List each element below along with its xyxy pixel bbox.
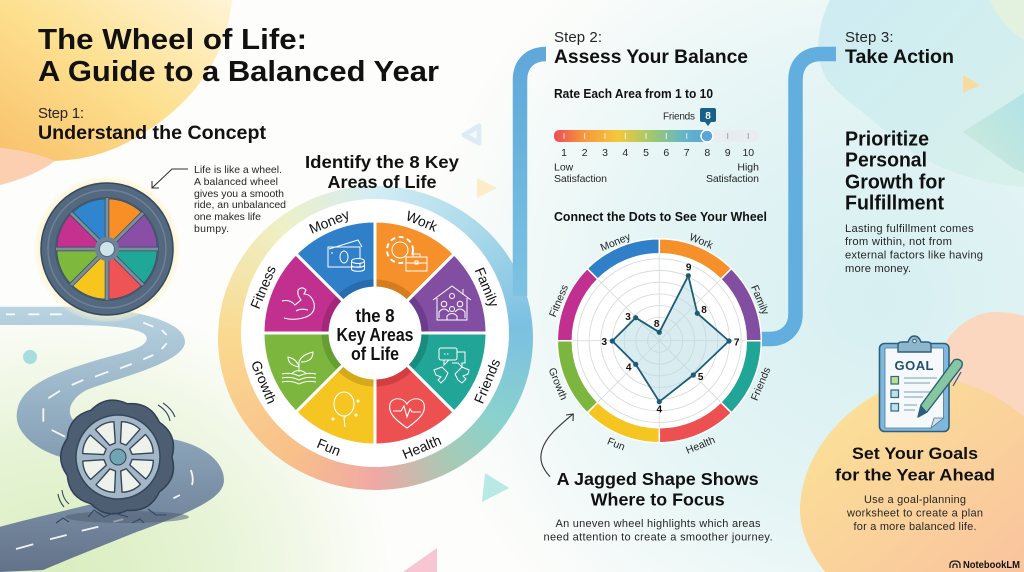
badge: rating 8: 8 <box>705 111 711 122</box>
road <box>0 307 224 572</box>
sector labels: Work <box>404 207 441 235</box>
icon: balanced wheel <box>34 176 180 322</box>
heading: identify the 8 key areas: Areas of Life <box>328 172 437 192</box>
slider low label <box>554 162 607 185</box>
heading: prioritize <box>845 129 945 214</box>
background: peach blob <box>0 148 55 185</box>
heading: step 2: Step 2: <box>554 29 602 46</box>
radar rim labels: Fitness <box>547 283 571 319</box>
hub text: of Life <box>351 344 399 364</box>
heading: set your goals <box>835 444 995 485</box>
icon: growth <box>282 352 316 384</box>
callout text: life is like a wheel: gives you a smooth <box>194 188 284 200</box>
icon: family house <box>433 286 471 320</box>
wheel hub <box>330 288 420 378</box>
inner shaded band <box>325 283 425 383</box>
callout text: life is like a wheel: Life is like a wheel. <box>194 164 282 176</box>
radar values: 8 <box>654 319 660 330</box>
hub text: Key Areas <box>336 325 414 345</box>
title <box>38 24 439 88</box>
slider <box>554 130 759 142</box>
background: yellow blob bottom right <box>800 378 1024 572</box>
heading: step 1: Understand the Concept <box>38 122 267 144</box>
radar polygon <box>612 276 729 402</box>
heading: set your goals: for the Year Ahead <box>835 466 995 485</box>
connector: step 3 <box>755 54 836 339</box>
radar values: 9 <box>686 263 692 274</box>
background: top-left yellow blob <box>0 0 232 161</box>
slider low label: Satisfaction <box>554 173 607 185</box>
text: goal planning: Use a goal-planning <box>864 494 966 506</box>
radar values: 8 <box>701 305 707 316</box>
background: diamond <box>963 93 1024 173</box>
sector labels: Family <box>472 265 502 309</box>
icon: money <box>328 240 364 271</box>
slider numbers: 4 <box>622 147 628 159</box>
arrow: jagged shape to radar <box>541 414 573 477</box>
radar points <box>610 273 732 404</box>
label: friends: Friends <box>663 112 695 122</box>
title: A Guide to a Balanced Year <box>38 56 439 88</box>
hub text <box>336 306 414 364</box>
slider numbers: 8 <box>704 147 710 159</box>
heading: prioritize: Personal <box>845 150 927 172</box>
text: goal planning <box>846 494 983 533</box>
radar rim labels: Growth <box>546 366 570 402</box>
radar values: 4 <box>626 363 632 374</box>
text: uneven wheel: An uneven wheel highlights which areas <box>556 518 761 530</box>
icon: health <box>390 399 424 428</box>
sector labels: Fitness <box>247 263 279 311</box>
icon: work <box>387 237 427 271</box>
slider numbers <box>561 147 754 159</box>
decorative triangle teal <box>482 473 509 502</box>
heading: set your goals: Set Your Goals <box>852 444 978 463</box>
radar rim labels: Family <box>748 283 771 317</box>
slider numbers: 7 <box>684 147 690 159</box>
slider numbers: 2 <box>582 147 588 159</box>
decorative triangle yellow <box>477 178 497 198</box>
background: peach blob bottom right <box>943 312 1024 430</box>
sector labels: Friends <box>471 356 503 406</box>
heading: step 3 <box>845 29 954 68</box>
icon: balloon <box>332 392 359 427</box>
radar values: 4 <box>657 405 663 416</box>
text: uneven wheel: need attention to create a smoother journey. <box>544 532 772 544</box>
callout text: life is like a wheel: A balanced wheel <box>194 176 278 188</box>
heading: jagged shape: Where to Focus <box>591 490 725 510</box>
road dashes <box>6 314 193 549</box>
sector labels: Fun <box>315 435 343 459</box>
radar values: 5 <box>698 372 704 383</box>
text: lasting fulfillment: Lasting fulfillment comes <box>845 223 974 235</box>
radar rim labels: Work <box>688 231 715 252</box>
badge: rating 8 <box>700 108 716 126</box>
callout text: life is like a wheel: bumpy. <box>194 223 229 235</box>
slider numbers: 9 <box>725 147 731 159</box>
sector labels: Health <box>400 432 443 462</box>
icon: goal clipboard: GOAL <box>894 358 934 373</box>
radar rim segments <box>557 239 761 443</box>
radar values <box>602 263 740 416</box>
heading: prioritize: Prioritize <box>845 129 929 151</box>
background: top-right blue blob <box>818 0 1024 187</box>
radar chart <box>546 231 773 457</box>
text: goal planning: worksheet to create a plan <box>846 508 983 520</box>
sector labels: Money <box>307 206 352 237</box>
radar rim labels: Friends <box>749 366 773 403</box>
decorative triangle pink <box>403 548 437 572</box>
slider numbers: 1 <box>561 147 567 159</box>
callout text: life is like a wheel: one makes life <box>194 211 261 223</box>
text: lasting fulfillment: from within, not from <box>845 236 952 248</box>
radar values: 3 <box>625 312 631 323</box>
panel: key areas wheel <box>241 199 509 467</box>
text: lasting fulfillment <box>845 223 983 275</box>
decorative dot <box>23 350 37 364</box>
heading: prioritize: Fulfillment <box>845 192 944 214</box>
heading: identify the 8 key areas <box>305 152 459 192</box>
heading: step 3: Take Action <box>845 46 954 68</box>
slider high label: Satisfaction <box>706 173 759 185</box>
heading: step 3: Step 3: <box>845 29 894 46</box>
radar rim labels <box>546 231 773 457</box>
sector labels: Growth <box>248 358 280 406</box>
heading: step 1: Step 1: <box>38 105 84 122</box>
heading: prioritize: Growth for <box>845 171 945 193</box>
background: yellow triangle top right <box>963 75 980 93</box>
text: lasting fulfillment: more money. <box>845 263 911 275</box>
slider high label <box>706 162 759 185</box>
connector: step 2 <box>520 54 546 296</box>
slider numbers: 10 <box>742 147 754 159</box>
radar rim labels: Money <box>599 231 633 254</box>
decorative triangle blue <box>464 126 479 143</box>
hub text: the 8 <box>356 306 394 326</box>
radar rim labels: Health <box>684 434 717 457</box>
slider numbers: 3 <box>602 147 608 159</box>
sector labels <box>247 206 503 462</box>
icon: fitness arm <box>282 288 314 319</box>
gradient ring behind key areas wheel <box>218 186 533 490</box>
radar rim labels: Fun <box>605 435 627 453</box>
slider numbers: 6 <box>663 147 669 159</box>
slider numbers: 5 <box>643 147 649 159</box>
title: The Wheel of Life: <box>38 24 307 56</box>
heading: jagged shape: A Jagged Shape Shows <box>557 469 759 489</box>
heading: step 2 <box>554 29 748 68</box>
radar values: 3 <box>602 337 608 348</box>
icon: goal clipboard <box>880 336 962 432</box>
callout text: life is like a wheel <box>194 164 286 235</box>
arrow: callout to wheel <box>152 169 188 188</box>
background: top-right pale corner <box>990 0 1024 40</box>
subheading: rate each area: Rate Each Area from 1 to 10 <box>554 86 713 101</box>
text: goal planning: for a more balanced life. <box>854 521 976 533</box>
slider high label: High <box>737 162 759 174</box>
subheading: connect the dots: Connect the Dots to See Your Wheel <box>554 210 767 224</box>
icon: friends <box>434 348 469 383</box>
heading: step 1 <box>38 105 267 144</box>
icon: bumpy wheel <box>56 400 189 523</box>
radar values: 7 <box>734 338 740 349</box>
heading: jagged shape <box>557 469 759 510</box>
wheel sectors <box>263 221 487 445</box>
radar grid <box>572 254 746 428</box>
callout text: life is like a wheel: ride, an unbalanced <box>194 199 286 211</box>
heading: step 2: Assess Your Balance <box>554 46 748 68</box>
slider low label: Low <box>554 162 574 174</box>
text: uneven wheel <box>544 518 772 544</box>
text: lasting fulfillment: external factors like having <box>845 250 983 262</box>
heading: identify the 8 key areas: Identify the 8 Key <box>305 152 459 172</box>
